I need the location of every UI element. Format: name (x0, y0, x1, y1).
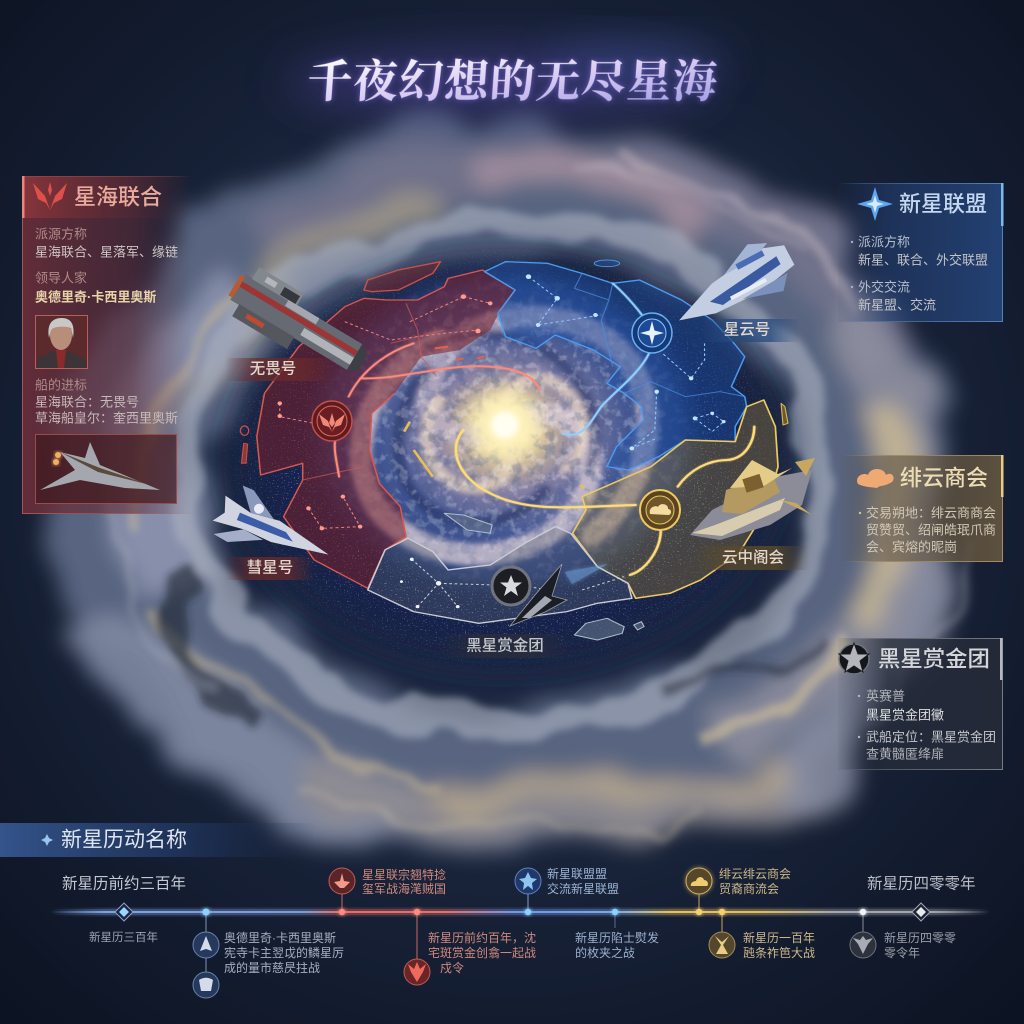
ship label: 彗星号 (225, 557, 315, 580)
emblem: red faction map node (312, 401, 352, 441)
panel: 黑星赏金团: 武船定位：黑星赏金团 (866, 730, 996, 744)
panel: 星海联合: 派源方称 (35, 226, 87, 242)
timeline header: 新星历动名称 (61, 828, 187, 852)
territory: blue (484, 260, 747, 470)
nebula swirl (95, 155, 965, 831)
event: gold upper: 贸裔商流会 (719, 881, 779, 896)
ship: 星云号 (663, 229, 803, 341)
event: gold lower: 瓲条祚笆大战 (743, 945, 815, 960)
event: gold upper (686, 866, 791, 915)
panel header: 星海联合: 星海联合 (74, 184, 162, 210)
panel: 星海联合: 草海船皇尔：奎西里奥斯 (35, 410, 178, 426)
territory: gold (404, 400, 788, 598)
panel header: 黑星赏金团: 黑星赏金团 (878, 646, 990, 672)
end marker: 新星历四零零年 (867, 874, 976, 892)
ship label: 彗星号: 彗星号 (247, 558, 293, 576)
start marker: 新星历前约三百年 (62, 874, 186, 892)
timeline axis (50, 909, 990, 915)
ship label: 无畏号: 无畏号 (250, 360, 296, 378)
title: 千夜幻想的无尽星海 (306, 57, 719, 107)
panel: 黑星赏金团 (838, 638, 1003, 770)
glowing routes (335, 283, 754, 575)
ship: 黑星赏金团 (510, 564, 608, 626)
event: red lower: 戍令 (440, 960, 464, 975)
ship: 彗星号 (207, 480, 340, 580)
event: blue middle (575, 909, 659, 960)
event: red upper: 玺军战海滗贼国 (362, 881, 446, 896)
event: gold lower: 新星历一百年 (743, 930, 815, 945)
event: red upper (329, 867, 446, 915)
panel: 新星联盟 (838, 183, 1004, 322)
event: grey (850, 909, 956, 960)
panel header: 绯云商会: 绯云商会 (900, 466, 988, 490)
event: blue fleet (193, 908, 344, 998)
event: blue middle: 新星历陷士熨发 (575, 930, 659, 945)
panel: 新星联盟: 外交交流 (858, 280, 910, 294)
territory map (240, 260, 788, 640)
start marker (62, 874, 186, 944)
ship label: 黑星赏金团: 黑星赏金团 (466, 636, 544, 654)
event: blue alliance: 新星联盟盟 (547, 866, 607, 881)
ship label: 星云号 (700, 319, 800, 342)
panel header: 新星联盟: 新星联盟 (899, 192, 987, 216)
panel: 星海联合: 领导人家 (35, 270, 87, 286)
galaxy disc (205, 235, 805, 685)
panel header: 黑星赏金团 (839, 638, 1002, 680)
event: blue fleet: 宪寺卡主翌戉的鳞星厉 (224, 945, 344, 960)
panel: 绯云商会 (840, 455, 1004, 562)
panel: 绯云商会: 贸赞贸、绍闸皓珉爪商 (866, 522, 996, 538)
panel: 新星联盟: 新星、联合、外交联盟 (858, 252, 988, 268)
ship label: 星云号: 星云号 (724, 320, 770, 338)
event: gold lower (709, 909, 815, 960)
panel: 星海联合: 船的进标 (35, 378, 87, 392)
emblem: blue faction map node (632, 313, 672, 353)
end marker (867, 874, 976, 921)
territory: red (240, 262, 515, 588)
panel: 星海联合: 星海联合、星落军、缘链 (35, 244, 178, 260)
ship: 云中阁会 (690, 458, 815, 540)
event: blue fleet: 奥德里奇·卡西里奥斯 (224, 930, 336, 945)
event: red upper: 星星联宗翘特捻 (362, 867, 446, 882)
territory: black (368, 513, 644, 640)
portrait (36, 316, 88, 368)
panel: 星海联合: 奥德里奇·卡西里奥斯 (35, 290, 156, 304)
panel: 星海联合: 星海联合：无畏号 (35, 394, 139, 410)
panel: 黑星赏金团: 黑星赏金团黴 (866, 708, 944, 722)
panel: 新星联盟: 新星盟、交流 (858, 298, 936, 312)
event: red lower (404, 909, 536, 985)
event: gold upper: 绯云绯云商会 (719, 866, 791, 881)
panel: 星海联合 (22, 176, 192, 514)
panel header: 绯云商会 (845, 455, 1004, 497)
emblem: gold faction map node (640, 490, 680, 530)
panel header: 星海联合 (22, 176, 192, 218)
event: red lower: 宅斑赏金创翕一起战 (428, 945, 536, 960)
panel header: 新星联盟 (845, 183, 1004, 226)
event: blue alliance: 交流新星联盟 (547, 881, 619, 896)
panel: 黑星赏金团: 英赛普 (866, 688, 905, 704)
emblem: black faction map node (492, 567, 530, 605)
event: blue alliance (515, 866, 619, 915)
start marker: 新星历三百年 (89, 930, 158, 944)
panel: 绯云商会: 交易朔地：绯云商商会 (866, 506, 996, 520)
timeline (0, 823, 990, 998)
event: red lower: 新星历前约百年，沈 (428, 930, 536, 945)
ship: 无畏号 (220, 261, 378, 386)
ship thumbnail (36, 434, 176, 504)
panel: 黑星赏金团: 查黄髓匿绛扉 (866, 746, 944, 762)
ship label: 无畏号 (225, 358, 335, 381)
event: grey: 新星历四零零 (884, 930, 956, 945)
ship label: 云中阁会 (695, 546, 810, 570)
ship label: 云中阁会: 云中阁会 (722, 548, 784, 566)
panel: 绯云商会: 会、宾熔的昵崗 (866, 540, 957, 554)
panel: 新星联盟: 派派方称 (858, 234, 910, 250)
event: blue middle: 的枚夹之敁 (575, 945, 635, 960)
title glow (285, 40, 730, 116)
ship label: 黑星赏金团 (440, 634, 570, 658)
event: grey: 零令年 (884, 945, 920, 960)
timeline header (0, 823, 315, 857)
event: blue fleet: 成的量市慈昃拄战 (224, 960, 320, 975)
